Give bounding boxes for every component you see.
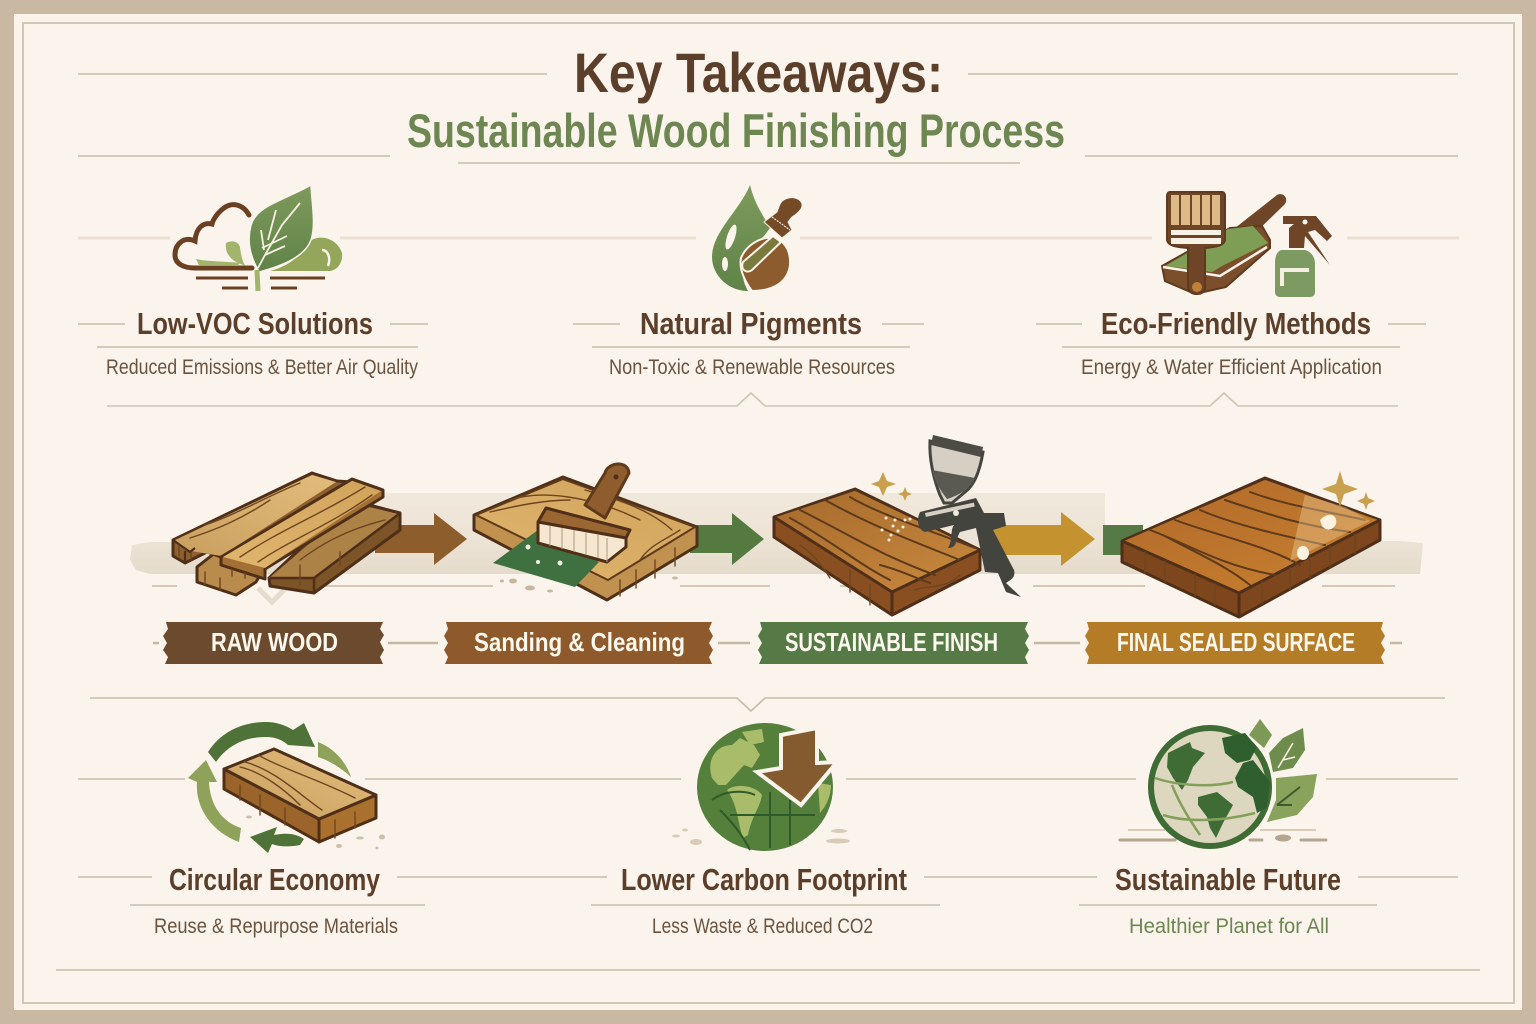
icon: drop and dropper [712,185,802,291]
icon: globe with down arrow [672,723,850,851]
step 1: raw wood planks [173,473,400,595]
description: Non-Toxic & Renewable Resources [609,356,895,379]
icon: cloud and leaf [175,185,342,291]
label: sustainable finish: SUSTAINABLE FINISH [785,627,998,657]
title: Key Takeaways: [574,41,943,104]
process band [130,493,1423,602]
heading: Natural Pigments [640,306,862,341]
icon: brush, tray and spray bottle [1162,192,1332,297]
step 4: final sealed surface [1122,471,1380,617]
arrow: sanding to finish [690,513,764,565]
bottom section faint divider [78,778,1458,780]
description: Less Waste & Reduced CO2 [652,915,873,938]
heading: Eco-Friendly Methods [1101,306,1371,341]
top section faint divider [78,236,1459,240]
panel: eco-friendly methods [1036,192,1426,379]
heading: Lower Carbon Footprint [621,862,907,897]
label: sustainable finish [758,622,1029,664]
label: sanding and cleaning [444,622,713,664]
label connectors [153,642,1402,644]
description: Energy & Water Efficient Application [1081,356,1382,379]
heading: Circular Economy [169,862,381,897]
icon: recycling arrows around wood block [188,722,385,853]
label: raw wood [163,622,384,664]
arrow: finish to sealed [990,512,1095,566]
arrow: raw wood to sanding [375,513,467,565]
description: Healthier Planet for All [1129,915,1329,938]
step 2: board with brush and sanding sheet [474,464,697,600]
label: sanding and cleaning: Sanding & Cleaning [474,627,685,657]
heading: Low-VOC Solutions [137,306,373,341]
label: raw wood: RAW WOOD [211,627,338,657]
panel: lower carbon footprint [591,723,1097,938]
divider with upward chevrons [107,393,1398,406]
panel: sustainable future [1079,719,1458,938]
icon: globe with leaves [1120,719,1326,846]
panel: circular economy [78,722,607,938]
description: Reuse & Repurpose Materials [154,915,398,938]
label: final sealed surface: FINAL SEALED SURFACE [1117,627,1355,657]
description: Reduced Emissions & Better Air Quality [106,356,418,379]
heading: Sustainable Future [1115,862,1341,897]
label: final sealed surface [1085,622,1385,664]
panel: natural pigments [573,185,924,379]
step 3: finished board with spray gun [774,435,1021,615]
divider with downward chevron [90,698,1445,711]
subtitle: Sustainable Wood Finishing Process [407,104,1065,157]
panel: low-VOC solutions [78,185,428,379]
green arrow tail [1103,525,1143,555]
footer divider [56,969,1480,971]
